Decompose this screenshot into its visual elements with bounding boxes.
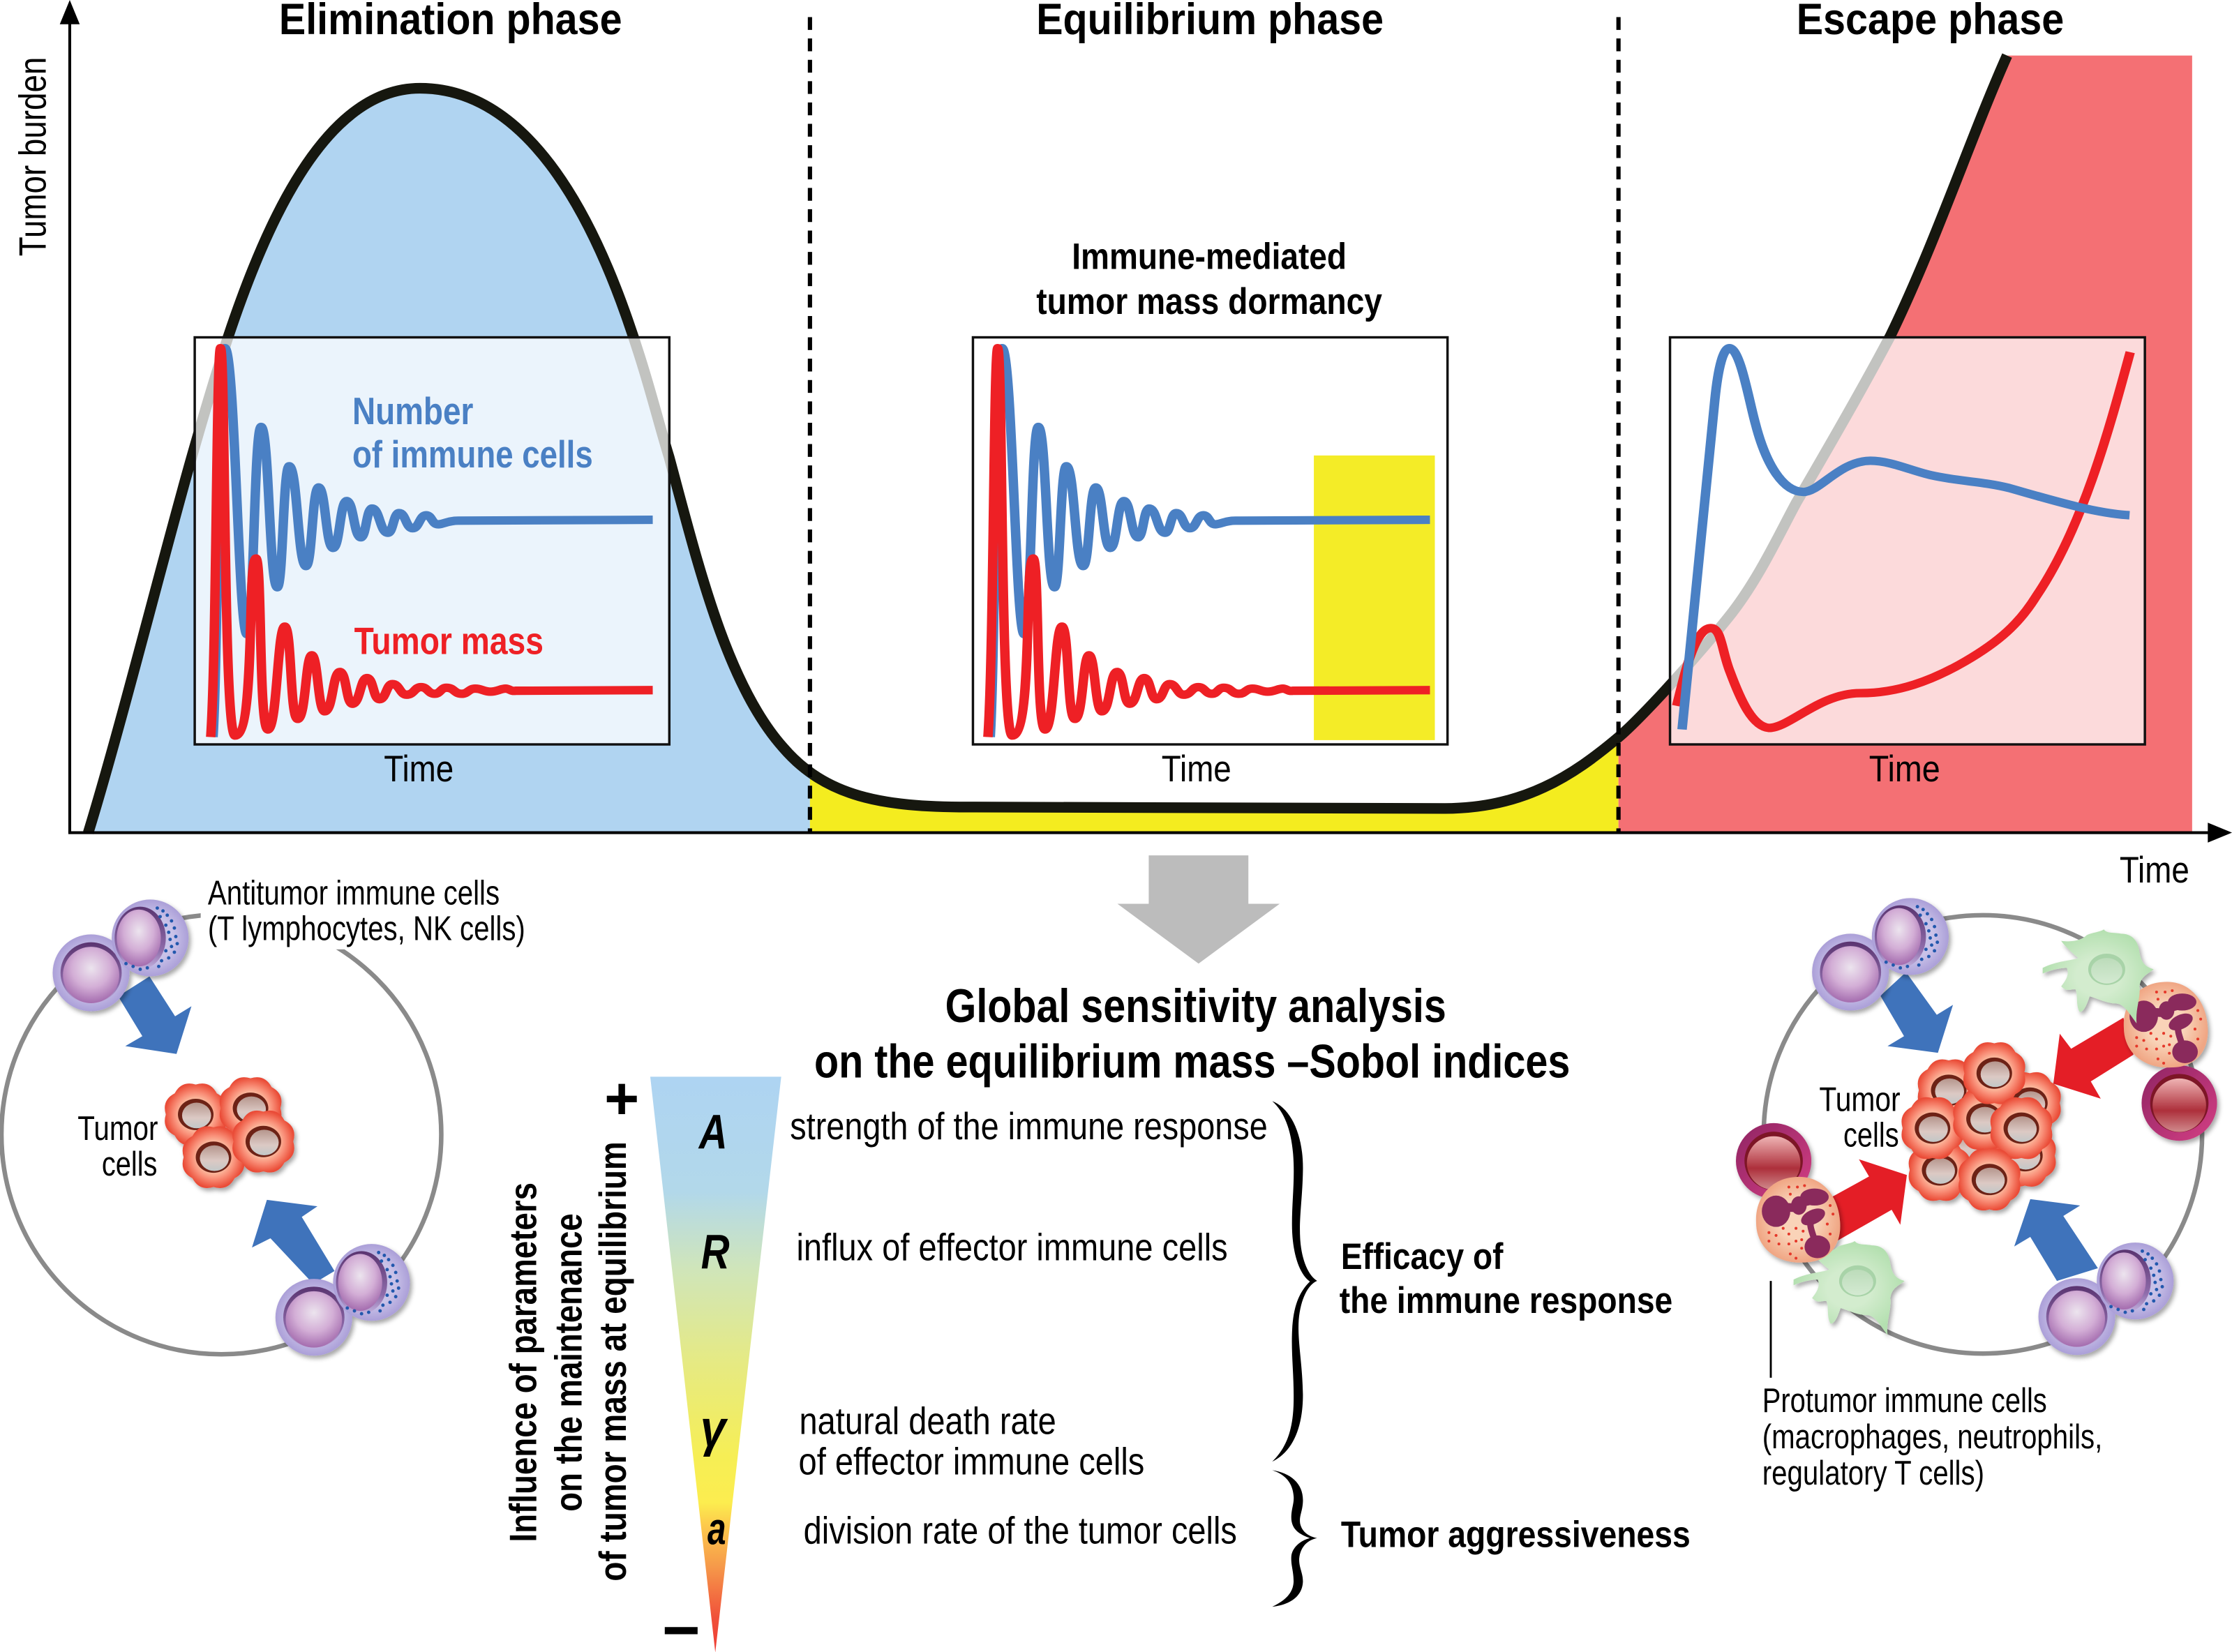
- heading: immune-mediated dormancy: tumor mass dormancy: [1036, 281, 1382, 322]
- group label: aggressiveness: Tumor aggressiveness: [1341, 1515, 1691, 1556]
- panel: escape microenvironment: [1736, 898, 2217, 1492]
- label: tumor cells: Tumor: [77, 1110, 158, 1148]
- vertical label: of tumor mass at equilibrium: [591, 1141, 634, 1582]
- tumor cell cluster: [1901, 1042, 2061, 1210]
- phase separators: [810, 17, 1619, 833]
- arrow: immune attack top: [118, 977, 191, 1054]
- brace: aggressiveness: [1272, 1470, 1317, 1607]
- label: number of immune cells: [352, 389, 593, 476]
- x axis label: Time: [2120, 850, 2189, 891]
- immune cells top: [52, 899, 188, 1012]
- axes: [10, 0, 2232, 891]
- parameter descriptions: division rate of the tumor cells: [804, 1509, 1237, 1552]
- panel: equilibrium inset: [973, 236, 1448, 790]
- arrow: immune attack bottom: [252, 1200, 334, 1284]
- protumor cells left: [1736, 1123, 1905, 1335]
- parameter letters: A: [698, 1104, 728, 1159]
- boundary circle: [1, 915, 441, 1354]
- leader line: [1770, 1281, 1772, 1378]
- immune cells curve: [213, 348, 653, 737]
- panel: elimination inset: [195, 338, 669, 790]
- group label: efficacy: Efficacy of: [1341, 1236, 1504, 1277]
- time label: Time: [384, 749, 454, 790]
- brace: efficacy: [1272, 1101, 1317, 1462]
- label: protumor immune cells: (macrophages, neutrophils,: [1762, 1418, 2102, 1456]
- group label: efficacy: [1340, 1236, 1672, 1321]
- label: protumor immune cells: regulatory T cells): [1762, 1455, 1984, 1492]
- label: antitumor immune cells: [208, 875, 525, 948]
- arrow: protumor right: [2053, 1018, 2134, 1099]
- parameter descriptions: influx of effector immune cells: [796, 1226, 1228, 1269]
- parameter descriptions: strength of the immune response: [790, 1104, 1268, 1148]
- title: [814, 980, 1570, 1088]
- arrow: antitumor bottom: [2014, 1199, 2098, 1281]
- parameter descriptions: of effector immune cells: [799, 1440, 1144, 1483]
- vertical label: on the maintenance: [546, 1213, 590, 1512]
- label: number of immune cells: Number: [352, 389, 473, 433]
- gradient wedge: [650, 1076, 781, 1652]
- label: antitumor immune cells: Antitumor immune cells: [208, 875, 500, 913]
- protumor cells right: [2043, 929, 2217, 1141]
- tumor burden curve: [88, 56, 2007, 833]
- label: antitumor immune cells: (T lymphocytes, NK cells): [208, 910, 525, 948]
- tumor cells: [165, 1077, 294, 1188]
- equilibrium phase yellow area: [810, 737, 1619, 833]
- label: number of immune cells: of immune cells: [352, 433, 593, 476]
- label: tumor cells: [1819, 1081, 1901, 1154]
- immune cells curve: [1682, 348, 2129, 730]
- panel: escape inset: [1670, 338, 2145, 790]
- tumor mass curve: [988, 348, 1430, 737]
- vertical label: Influence of parameters: [502, 1182, 545, 1542]
- tumor mass curve: [211, 348, 653, 737]
- tumor mass curve: [1677, 352, 2130, 728]
- boundary circle: [1764, 915, 2202, 1353]
- time label: Time: [1162, 749, 1231, 790]
- heading: immune-mediated dormancy: [1036, 236, 1382, 322]
- elimination phase blue area: [88, 89, 810, 833]
- phase headings: [279, 0, 2064, 44]
- antitumor cells bottom: [2039, 1242, 2173, 1355]
- inset frame: [195, 338, 669, 744]
- y axis label: Tumor burden: [10, 57, 54, 256]
- time label: Time: [1869, 749, 1940, 790]
- panel: elimination microenvironment: [1, 875, 531, 1356]
- antitumor cells top: [1812, 898, 1949, 1011]
- equilibrium highlight: [1314, 456, 1435, 740]
- arrow: antitumor top: [1880, 972, 1953, 1053]
- parameter letters: γ: [701, 1400, 728, 1457]
- label: tumor mass: Tumor mass: [354, 619, 544, 662]
- immune cells curve: [990, 348, 1430, 737]
- escape phase red area: [1619, 56, 2192, 833]
- inset frame: [973, 338, 1448, 744]
- label: tumor cells: cells: [102, 1146, 157, 1183]
- parameter descriptions: natural death rate: [800, 1399, 1056, 1443]
- x axis arrow: [68, 823, 2232, 843]
- inset frame: [1670, 338, 2145, 744]
- parameter letters: [698, 1104, 730, 1554]
- label: protumor immune cells: Protumor immune cells: [1762, 1382, 2047, 1420]
- label: tumor cells: Tumor: [1819, 1081, 1901, 1118]
- arrow: down to sensitivity analysis: [1118, 855, 1280, 963]
- label: tumor cells: [77, 1110, 158, 1183]
- title: Global sensitivity analysis: [945, 980, 1446, 1032]
- title: on the equilibrium mass –Sobol indices: [814, 1035, 1570, 1088]
- parameter letters: a: [707, 1503, 726, 1554]
- panel: global sensitivity analysis: [502, 980, 1691, 1652]
- label: tumor cells: cells: [1843, 1116, 1899, 1154]
- immune cells bottom: [276, 1244, 410, 1356]
- vertical label: [502, 1141, 634, 1582]
- heading: immune-mediated dormancy: Immune-mediated: [1072, 236, 1347, 278]
- label: protumor immune cells: [1762, 1382, 2102, 1492]
- parameter descriptions: [790, 1104, 1268, 1552]
- group label: efficacy: the immune response: [1340, 1280, 1672, 1321]
- arrow: protumor left: [1829, 1159, 1907, 1245]
- label background: [201, 876, 531, 949]
- main chart: phase areas and tumor burden curve: [88, 17, 2192, 833]
- plus sign: +: [604, 1065, 639, 1132]
- y axis arrow: [60, 0, 80, 833]
- parameter letters: R: [701, 1224, 730, 1279]
